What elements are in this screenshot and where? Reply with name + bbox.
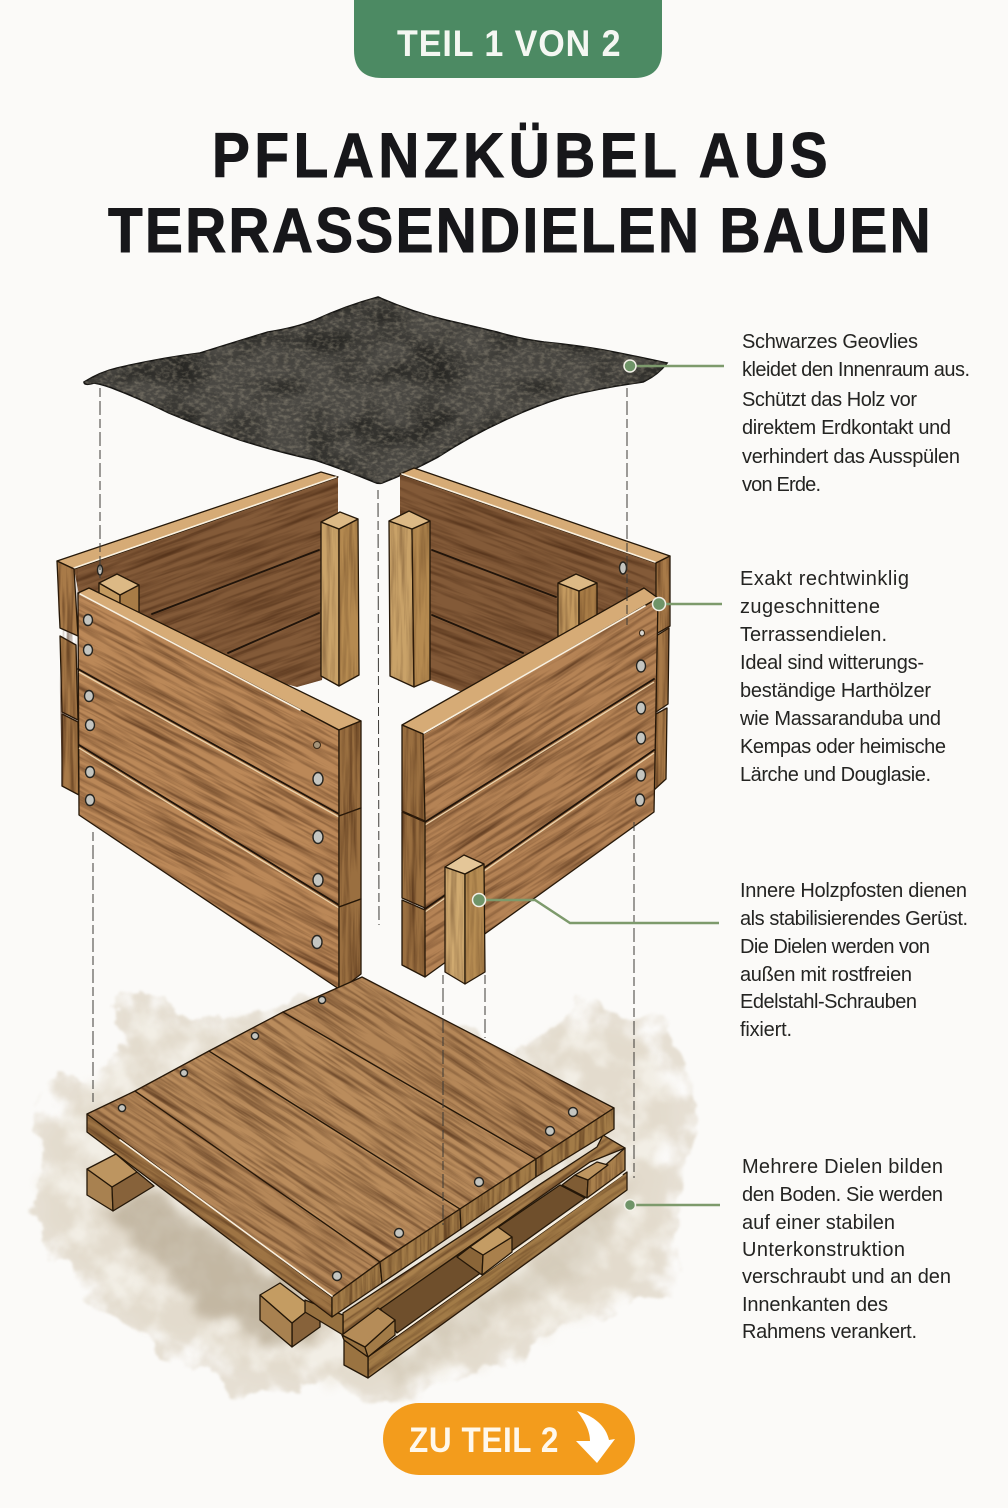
- text: geotextile description: [742, 331, 970, 496]
- middle beam: [305, 1135, 625, 1335]
- text: floor description: Mehrere Dielen bilden: [742, 1156, 943, 1178]
- wooden frame: front left wall: [78, 588, 361, 989]
- plank 3: [209, 1012, 536, 1229]
- tab: part label: [354, 0, 662, 78]
- base: substructure: [87, 1135, 627, 1378]
- button: to part 2: [383, 1403, 635, 1475]
- text: boards description: Kempas oder heimische: [740, 736, 946, 758]
- long front beam: [344, 1172, 627, 1378]
- text: geotextile description: verhindert das Ausspülen: [742, 446, 960, 468]
- block: centre spacer: [457, 1227, 512, 1275]
- post: right wall end: [389, 511, 430, 687]
- block: left runner: [87, 1154, 154, 1211]
- wooden frame: back right wall: [400, 468, 670, 790]
- plank 4: [283, 977, 614, 1177]
- block: front left runner: [260, 1283, 320, 1347]
- text: posts description: Innere Holzpfosten dienen: [740, 880, 967, 902]
- text: geotextile description: direktem Erdkontakt und: [742, 417, 951, 439]
- text: floor description: [742, 1156, 951, 1343]
- text: posts description: als stabilisierendes Gerüst.: [740, 908, 968, 930]
- text: posts description: [740, 880, 968, 1041]
- text: boards description: Lärche und Douglasie.: [740, 764, 931, 786]
- text: floor description: verschraubt und an den: [742, 1266, 951, 1288]
- leader: base: [624, 1200, 720, 1210]
- text: boards description: beständige Harthölzer: [740, 680, 931, 702]
- wooden frame: front right wall: [402, 588, 658, 977]
- text: posts description: Edelstahl-Schrauben: [740, 991, 917, 1013]
- post: left wall end: [321, 512, 359, 686]
- post: front right: [445, 855, 485, 984]
- ground stain: [24, 985, 692, 1408]
- title: PFLANZKÜBEL AUS: [212, 120, 828, 191]
- leader: boards: [652, 598, 722, 610]
- text: floor description: Rahmens verankert.: [742, 1321, 917, 1343]
- text: geotextile description: von Erde.: [742, 474, 821, 496]
- text: geotextile description: kleidet den Innenraum aus.: [742, 359, 970, 381]
- text: floor description: den Boden. Sie werden: [742, 1184, 943, 1206]
- plank 2: [135, 1051, 461, 1283]
- leader: geotextile: [624, 360, 724, 372]
- screws: front right wall: [636, 630, 646, 806]
- text: boards description: zugeschnittene: [740, 596, 880, 618]
- screws: floor: [118, 996, 578, 1280]
- text: posts description: außen mit rostfreien: [740, 964, 912, 986]
- button: to part 2: ZU TEIL 2: [409, 1422, 558, 1460]
- dark interior: [380, 1185, 585, 1333]
- text: posts description: Die Dielen werden von: [740, 936, 930, 958]
- plank 1: [87, 1091, 382, 1317]
- text: floor description: Innenkanten des: [742, 1294, 888, 1316]
- base: floor planks: [87, 977, 614, 1317]
- post: back right corner: [558, 574, 597, 650]
- title: [108, 120, 931, 266]
- text: boards description: Exakt rechtwinklig: [740, 568, 909, 590]
- text: boards description: Terrassendielen.: [740, 624, 887, 646]
- text: posts description: fixiert.: [740, 1019, 792, 1041]
- wooden frame: back left wall: [57, 472, 338, 795]
- text: boards description: Ideal sind witterungs-: [740, 652, 924, 674]
- block: front spacer: [342, 1308, 395, 1357]
- text: boards description: [739, 568, 946, 786]
- text: floor description: Unterkonstruktion: [742, 1239, 905, 1261]
- assembly guide lines: [93, 388, 634, 1225]
- block: right spacer: [562, 1148, 625, 1198]
- text: geotextile description: Schwarzes Geovlies: [742, 331, 918, 353]
- post: back left corner: [99, 574, 139, 625]
- text: geotextile description: Schützt das Holz vor: [742, 389, 917, 411]
- icon: curved down arrow: [576, 1411, 615, 1463]
- title: TERRASSENDIELEN BAUEN: [108, 195, 931, 266]
- text: floor description: auf einer stabilen: [742, 1212, 895, 1234]
- text: boards description: wie Massaranduba und: [739, 708, 941, 730]
- leader: post: [472, 894, 719, 923]
- tab: part label: TEIL 1 VON 2: [397, 23, 621, 64]
- geotextile sheet: [84, 297, 667, 483]
- screws: front left wall: [84, 614, 323, 948]
